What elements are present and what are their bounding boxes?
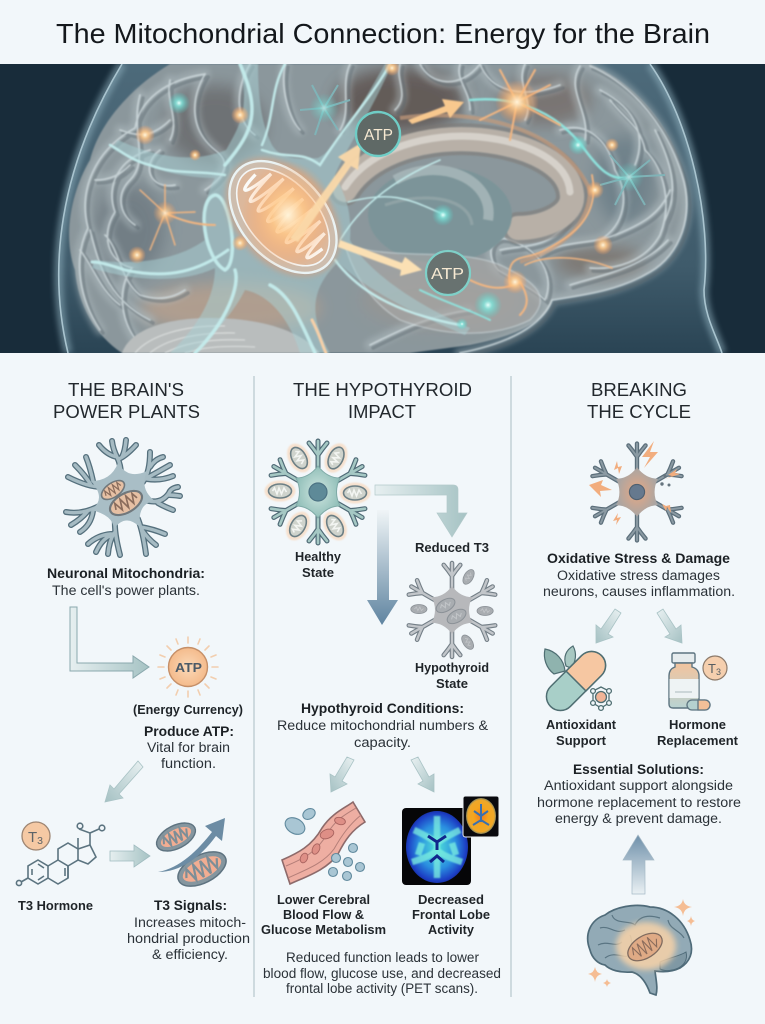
text: hypothyroid conditions: capacity. bbox=[354, 735, 411, 750]
text: produce ATP: function. bbox=[161, 756, 216, 771]
text: produce ATP: Vital for brain bbox=[147, 740, 230, 755]
ATP arrow lower bbox=[338, 240, 422, 276]
temporal lobe band bbox=[345, 245, 540, 333]
arrow: to frontal lobe bbox=[411, 757, 434, 792]
text: T3 hormone: T3 Hormone bbox=[18, 899, 93, 913]
central energy glow bbox=[242, 161, 334, 269]
icon: hormone bottle bbox=[669, 653, 727, 710]
text: reduced function summary: blood flow, glucose use, and decreased bbox=[263, 966, 501, 981]
text: essential solutions: Essential Solutions: bbox=[573, 762, 704, 777]
panel: breaking the cycle bbox=[537, 379, 741, 995]
ATP arrow up bbox=[290, 143, 361, 242]
arrow: bent to reduced T3 bbox=[375, 485, 467, 537]
arrow: to antioxidant bbox=[596, 609, 621, 643]
text: produce ATP bbox=[133, 703, 243, 771]
heading bbox=[587, 379, 691, 422]
text: antioxidant support bbox=[546, 718, 617, 748]
text: hypothyroid conditions: Reduce mitochondrial numbers & bbox=[277, 718, 488, 733]
mitochondrion bbox=[222, 156, 343, 278]
icon: T3 molecule bbox=[16, 823, 105, 886]
teal neural branches bbox=[92, 64, 628, 353]
cerebellum bbox=[122, 318, 320, 353]
corpus callosum band bbox=[345, 115, 590, 262]
text: hormone replacement: Hormone bbox=[669, 718, 726, 732]
neuron cell body around mitochondrion bbox=[92, 64, 470, 353]
text: T3 signals: hondrial production bbox=[127, 931, 250, 946]
text: hypothyroid conditions: Hypothyroid Conditions: bbox=[301, 701, 464, 716]
text: healthy state: Healthy bbox=[295, 550, 341, 564]
text: T3 signals bbox=[127, 898, 250, 962]
text: essential solutions: energy & prevent damage. bbox=[555, 811, 722, 826]
ATP bubble top: ATP bbox=[364, 127, 393, 144]
cortical folds bbox=[79, 64, 690, 356]
text: healthy state: State bbox=[302, 566, 334, 580]
heading: THE BRAIN'S bbox=[68, 379, 184, 400]
thalamus region bbox=[368, 167, 512, 263]
ATP bubble bottom bbox=[426, 251, 470, 295]
orange neural fibres bbox=[140, 70, 612, 353]
text: healthy state bbox=[295, 550, 341, 580]
icon: ATP sun bbox=[158, 637, 218, 697]
icon: antioxidant capsule bbox=[541, 646, 611, 716]
text: hypothyroid state bbox=[415, 661, 489, 691]
text: T3 signals: Increases mitoch- bbox=[134, 915, 246, 930]
arrow: to blood flow bbox=[330, 757, 354, 792]
icon: healthy neuron bbox=[264, 439, 370, 545]
heading bbox=[293, 379, 472, 422]
text: decreased frontal lobe activity bbox=[412, 893, 490, 937]
heading bbox=[53, 379, 200, 422]
arrow: to T3 signals bbox=[110, 845, 150, 867]
icon: blood vessel and glucose bbox=[282, 802, 365, 884]
text: decreased frontal lobe activity: Decreased bbox=[418, 893, 484, 907]
text: neuronal mitochondria bbox=[47, 566, 205, 598]
icon: damaged neuron bbox=[589, 441, 683, 540]
arrow: big up bbox=[623, 835, 654, 894]
teal neurons bbox=[300, 85, 665, 205]
ATP bubble top bbox=[356, 112, 400, 156]
icon: PET scan bbox=[402, 796, 499, 885]
icon: T3 badge: 3 bbox=[37, 835, 43, 847]
text: produce ATP: Produce ATP: bbox=[144, 724, 234, 739]
icon: T3 badge bbox=[22, 822, 50, 850]
text: essential solutions: Antioxidant support alongside bbox=[544, 778, 733, 793]
text: reduced function summary: frontal lobe activity (PET scans). bbox=[286, 981, 478, 996]
ATP bubble bottom: ATP bbox=[431, 266, 464, 283]
text: antioxidant support: Support bbox=[556, 734, 607, 748]
icon: neuron with mitochondria bbox=[66, 440, 180, 555]
panel: the hypothyroid impact bbox=[261, 379, 501, 996]
text: decreased frontal lobe activity: Frontal Lobe bbox=[412, 908, 490, 922]
head silhouette bbox=[59, 64, 722, 353]
column dividers bbox=[254, 376, 511, 997]
icon: brain with mitochondrion bbox=[588, 899, 695, 995]
text: produce ATP: (Energy Currency) bbox=[133, 703, 243, 717]
panel: the brain's power plants bbox=[16, 379, 250, 962]
text: hypothyroid state: State bbox=[436, 677, 468, 691]
glowing points bbox=[128, 60, 644, 330]
arrow: diagonal to T3 bbox=[105, 761, 143, 802]
text: hormone replacement bbox=[657, 718, 739, 748]
arrow: to hormone bbox=[657, 609, 682, 643]
title: The Mitochondrial Connection: Energy for the Brain bbox=[56, 18, 710, 49]
heading: THE HYPOTHYROID bbox=[293, 379, 472, 400]
text: essential solutions: hormone replacement to restore bbox=[537, 795, 741, 810]
text: hypothyroid conditions bbox=[277, 701, 488, 750]
text: decreased frontal lobe activity: Activity bbox=[428, 923, 474, 937]
text: hypothyroid state: Hypothyroid bbox=[415, 661, 489, 675]
icon: hormone bottle: T bbox=[708, 661, 716, 676]
text: T3 signals: T3 Signals: bbox=[154, 898, 227, 913]
hero illustration: glowing brain with mitochondrion and ATP bbox=[0, 60, 765, 356]
text: essential solutions bbox=[537, 762, 741, 826]
text: neuronal mitochondria: The cell's power plants. bbox=[52, 583, 200, 598]
text: lower cerebral blood flow: Glucose Metabolism bbox=[261, 923, 386, 937]
icon: hormone bottle: 3 bbox=[716, 667, 721, 677]
heading: THE CYCLE bbox=[587, 401, 691, 422]
text: reduced function summary bbox=[263, 950, 501, 996]
icon: mitochondria increasing bbox=[152, 817, 232, 893]
brain body bbox=[69, 64, 688, 353]
icon: ATP sun: ATP bbox=[175, 660, 202, 675]
text: lower cerebral blood flow bbox=[261, 893, 386, 937]
arrow: big down bbox=[367, 510, 398, 625]
text: oxidative stress: Oxidative stress damages bbox=[557, 568, 720, 583]
heading: BREAKING bbox=[591, 379, 687, 400]
heading: IMPACT bbox=[348, 401, 416, 422]
text: antioxidant support: Antioxidant bbox=[546, 718, 617, 732]
text: oxidative stress: neurons, causes inflammation. bbox=[543, 584, 735, 599]
text: reduced T3: Reduced T3 bbox=[415, 541, 489, 555]
text: oxidative stress bbox=[543, 551, 735, 599]
icon: T3 badge: T bbox=[28, 829, 37, 846]
text: T3 signals: & efficiency. bbox=[152, 947, 228, 962]
text: hormone replacement: Replacement bbox=[657, 734, 739, 748]
ATP arrow to upper neuron bbox=[408, 99, 464, 124]
text: neuronal mitochondria: Neuronal Mitochondria: bbox=[47, 566, 205, 581]
text: lower cerebral blood flow: Blood Flow & bbox=[283, 908, 364, 922]
arrow: to ATP bbox=[70, 607, 149, 678]
text: reduced function summary: Reduced function leads to lower bbox=[286, 950, 479, 965]
icon: hypothyroid neuron bbox=[407, 563, 497, 657]
text: oxidative stress: Oxidative Stress & Damage bbox=[547, 551, 730, 566]
text: lower cerebral blood flow: Lower Cerebral bbox=[277, 893, 370, 907]
heading: POWER PLANTS bbox=[53, 401, 200, 422]
